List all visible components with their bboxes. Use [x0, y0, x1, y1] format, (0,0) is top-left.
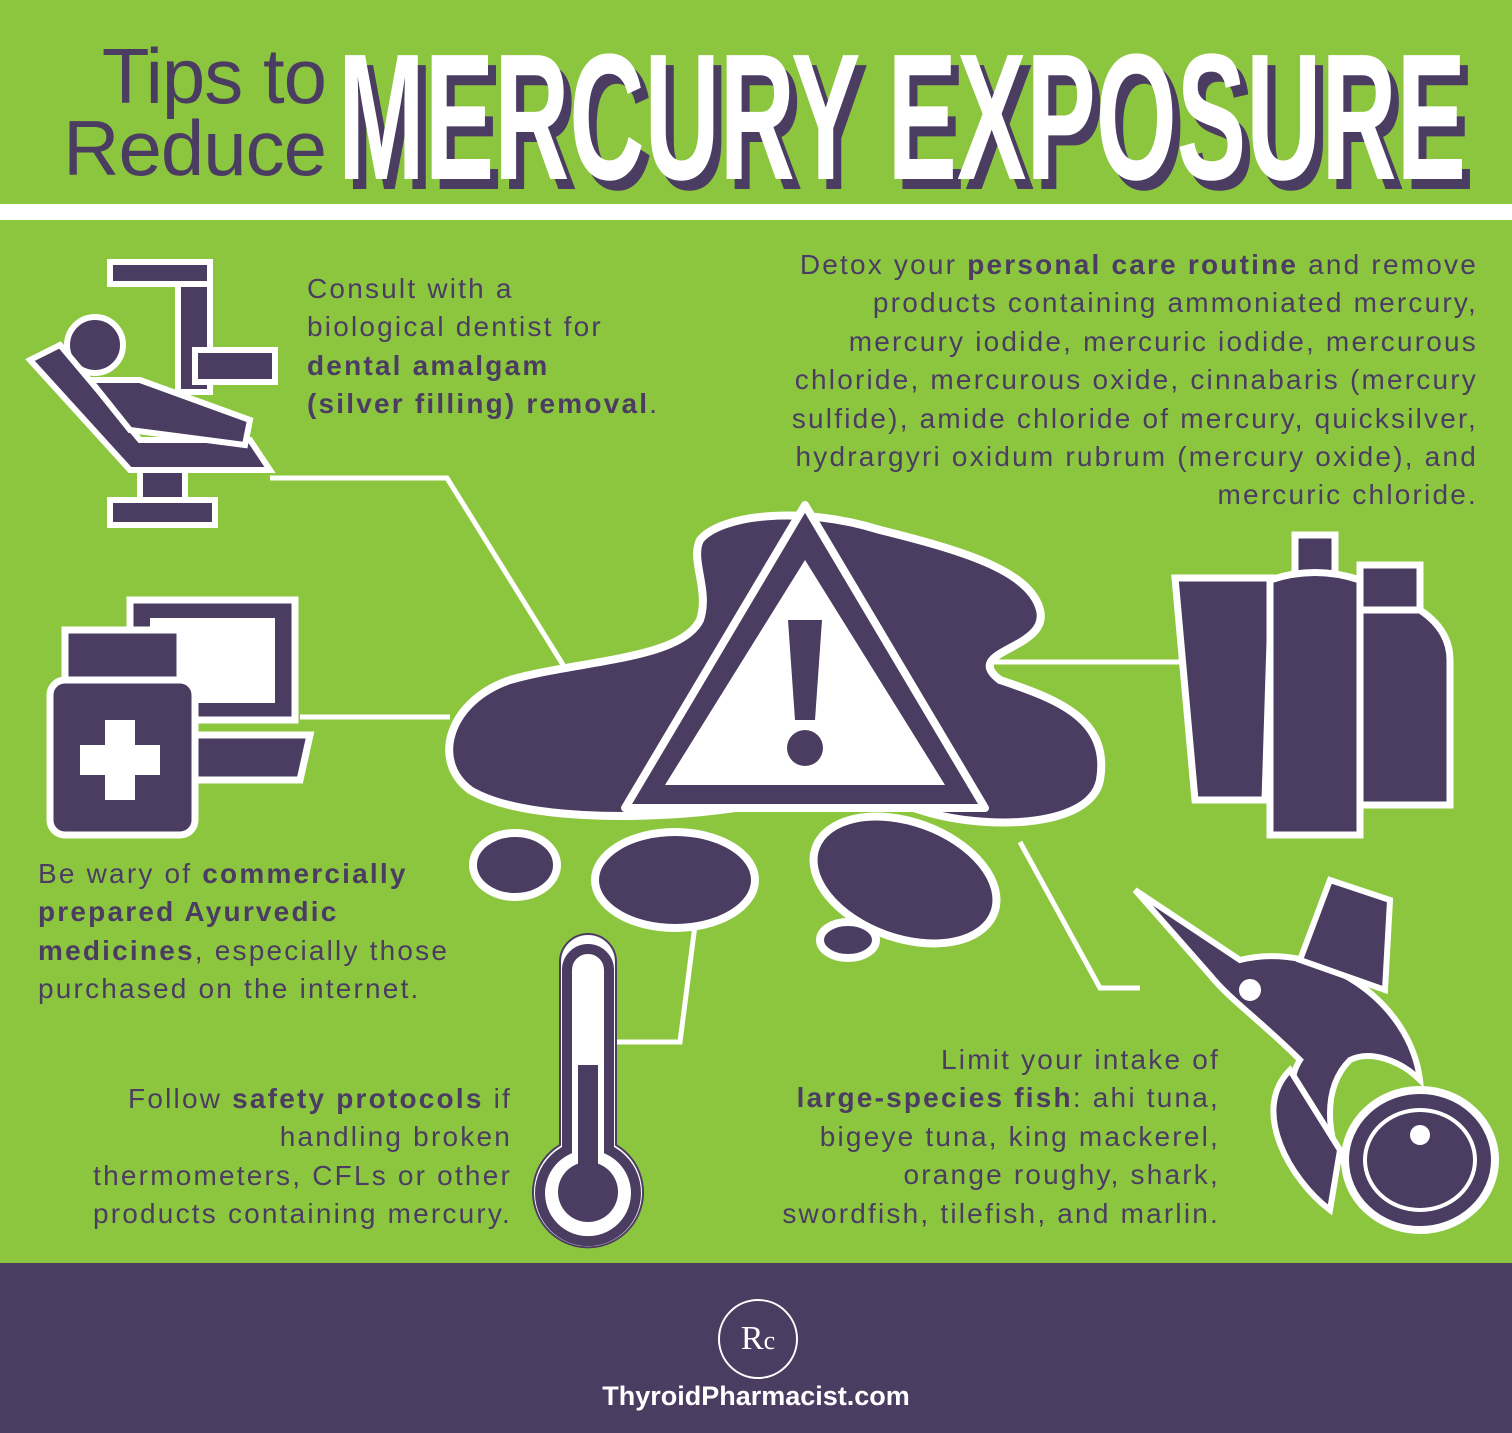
title: tips to reduce: Reduce [63, 104, 326, 192]
text: dental [307, 273, 659, 419]
footer url: ThyroidPharmacist.com [602, 1381, 910, 1411]
puddle [449, 516, 1101, 967]
text: ayurvedic: prepared Ayurvedic [38, 896, 339, 927]
text: thermometers: thermometers, CFLs or other [93, 1160, 512, 1191]
text: ayurvedic: medicines, especially those [38, 935, 449, 966]
text: thermometers: handling broken [280, 1121, 512, 1152]
text: personal care: chloride, mercurous oxide, cinnabaris (mercury [795, 364, 1478, 395]
text: ayurvedic: Be wary of commercially [38, 858, 408, 889]
text: dental: Consult with a [307, 273, 514, 304]
icon: medicine and laptop [50, 600, 310, 835]
text: personal care: mercury iodide, mercuric iodide, mercurous [849, 326, 1478, 357]
title: tips to reduce [63, 32, 326, 192]
title: tips to reduce: Tips to [102, 32, 326, 120]
text: personal care: hydrargyri oxidum rubrum (mercury oxide), and [795, 441, 1478, 472]
icon: swordfish and steak [1135, 880, 1495, 1230]
icon: thermometer [533, 934, 643, 1247]
text: fish: Limit your intake of [941, 1044, 1220, 1075]
logo: Rc [741, 1320, 775, 1357]
text: fish: bigeye tuna, king mackerel, [820, 1121, 1220, 1152]
text: dental: biological dentist for [307, 311, 603, 342]
text: personal care [792, 249, 1478, 510]
footer [0, 1263, 1512, 1433]
title [63, 17, 1474, 200]
text: personal care: mercuric chloride. [1217, 479, 1478, 510]
text: personal care: Detox your personal care routine and remove [800, 249, 1478, 280]
text: thermometers: products containing mercury. [93, 1198, 512, 1229]
text: personal care: sulfide), amide chloride of mercury, quicksilver, [792, 403, 1478, 434]
text: fish: large-species fish: ahi tuna, [797, 1082, 1220, 1113]
icon: dental chair [30, 262, 275, 525]
text: ayurvedic: purchased on the internet. [38, 973, 421, 1004]
text: ayurvedic [38, 858, 449, 1004]
logo [718, 1299, 798, 1379]
icon: warning triangle [625, 505, 985, 808]
text: dental: dental amalgam [307, 350, 549, 381]
text: fish: swordfish, tilefish, and marlin. [782, 1198, 1220, 1229]
text: fish: orange roughy, shark, [903, 1159, 1220, 1190]
text: thermometers [93, 1083, 512, 1229]
text: personal care: products containing ammoniated mercury, [873, 287, 1478, 318]
text: thermometers: Follow safety protocols if [128, 1083, 512, 1114]
text: dental: (silver filling) removal. [307, 388, 659, 419]
text: fish [782, 1044, 1220, 1229]
icon: personal care bottles [1175, 535, 1450, 835]
